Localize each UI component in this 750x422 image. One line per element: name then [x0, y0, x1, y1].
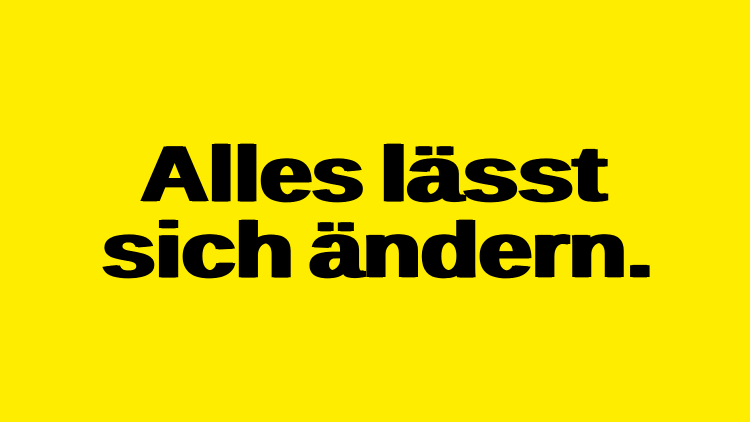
heading: line one: [140, 130, 608, 218]
heading: line one: lässt: [380, 130, 607, 218]
heading: line one: Alles: [141, 130, 364, 218]
heading: line two: sich: [102, 206, 294, 294]
heading: line two: ändern.: [310, 206, 653, 294]
heading: line two: [102, 206, 653, 294]
